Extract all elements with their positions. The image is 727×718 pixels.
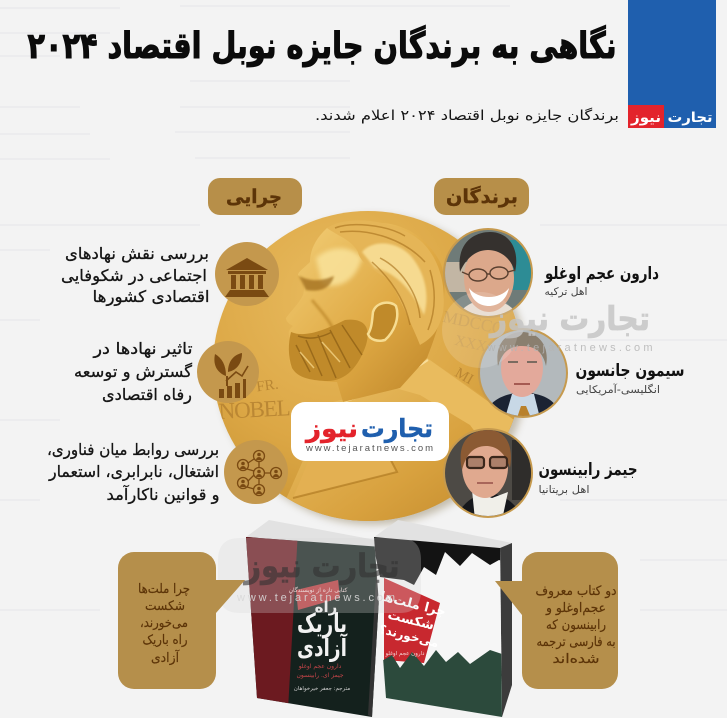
winner label: Acemoglu xyxy=(544,264,659,298)
header: blue brand block xyxy=(628,0,716,128)
center logo xyxy=(291,402,449,461)
center logo: www.tejaratnews.com xyxy=(305,443,434,454)
book: Why Nations Fail xyxy=(370,520,512,718)
book: The Narrow Corridor: کتابی تازه از نویسندگان xyxy=(289,586,348,594)
medal hair xyxy=(327,220,444,345)
portrait: James Robinson xyxy=(440,428,536,520)
center logo: نیوز xyxy=(304,414,358,444)
text block: reason 2: گسترش و توسعه xyxy=(74,362,192,382)
heading pill: why xyxy=(208,178,302,215)
winner label: Johnson xyxy=(576,361,684,396)
portrait: Simon Johnson xyxy=(478,328,570,420)
subtitle: برندگان جایزه نوبل اقتصاد ۲۰۲۴ اعلام شدند. xyxy=(315,107,619,124)
logo: red news tag xyxy=(628,105,664,128)
book: The Narrow Corridor: آزادی xyxy=(297,633,348,662)
medal lettering: MI xyxy=(452,365,476,388)
header: blue brand block: تجارت xyxy=(668,110,712,126)
book: Why Nations Fail: دارون عجم اوغلو xyxy=(384,651,425,657)
winner label: Acemoglu: دارون عجم اوغلو xyxy=(544,264,659,284)
icon: network of people xyxy=(224,440,288,504)
callout: left book title: آزادی xyxy=(151,649,180,666)
callout: left book title: شکست xyxy=(145,599,185,614)
book: The Narrow Corridor: جیمز ای. رابینسون xyxy=(296,672,344,679)
heading pill: why: چرایی xyxy=(226,186,282,208)
text block: reason 1: اجتماعی در شکوفایی xyxy=(61,266,207,286)
book: The Narrow Corridor: دارون عجم اوغلو xyxy=(298,663,342,670)
callout: right books note: شده‌اند xyxy=(552,652,600,667)
medal beard xyxy=(289,320,368,381)
medal ear xyxy=(368,303,397,341)
winner label: Johnson: انگلیسی-آمریکایی xyxy=(576,383,660,396)
watermark: winners area: تجارت نیوز xyxy=(488,299,650,339)
watermark: winners area: www.tejaratnews.com xyxy=(486,342,652,354)
text block: reason 3 xyxy=(47,440,220,505)
text block: reason 3: و قوانین ناکارآمد xyxy=(106,485,220,505)
icon: growth plant and bars xyxy=(197,341,259,403)
winner label: Johnson: سیمون جانسون xyxy=(576,361,684,381)
book: Why Nations Fail: شکست xyxy=(386,608,436,634)
text block: reason 3: بررسی روابط میان فناوری، xyxy=(47,440,219,460)
callout: left book title: چرا ملت‌ها xyxy=(138,582,190,597)
center logo: تجارت xyxy=(361,414,433,443)
callout: right books note: به فارسی ترجمه xyxy=(536,635,616,650)
heading pill: winners xyxy=(434,178,529,215)
winner label: Robinson: اهل بریتانیا xyxy=(538,484,590,496)
book: Why Nations Fail: چرا ملت‌ها xyxy=(378,589,447,620)
watermark: books area: تجارت نیوز xyxy=(243,547,400,585)
callout: right books note: رابینسون که xyxy=(546,618,606,633)
book: The Narrow Corridor: راه xyxy=(315,598,337,616)
medal lettering xyxy=(218,307,505,424)
callout: right books note xyxy=(495,552,618,689)
medal lettering: FR. xyxy=(255,377,280,395)
book: The Narrow Corridor xyxy=(240,520,386,717)
medal lettering: XXX xyxy=(453,333,489,355)
text block: reason 3: اشتغال، نابرابری، استعمار xyxy=(48,462,219,482)
text block: reason 2: تاثیر نهادها در xyxy=(92,339,192,359)
text block: reason 2 xyxy=(74,339,192,405)
nobel medal xyxy=(213,211,528,530)
text block: reason 2: رفاه اقتصادی xyxy=(102,385,192,405)
winner label: Robinson xyxy=(538,460,638,496)
portrait: Daron Acemoglu xyxy=(440,228,536,320)
icon: institution building xyxy=(215,242,279,306)
callout: right books note: دو کتاب معروف xyxy=(536,584,617,599)
callout: left book title: راه باریک xyxy=(142,633,188,648)
medal brow and eye xyxy=(299,276,334,291)
text block: reason 1 xyxy=(61,244,210,307)
watermark: winners area xyxy=(442,292,652,368)
medal head xyxy=(286,223,444,402)
header: blue brand block: نیوز xyxy=(630,110,661,126)
medal face highlight xyxy=(316,248,362,286)
winner label: Acemoglu: اهل ترکیه xyxy=(544,286,588,298)
watermark: books area: www.tejaratnews.com xyxy=(236,592,395,604)
text block: reason 1: بررسی نقش نهادهای xyxy=(65,244,209,264)
book: Why Nations Fail: می‌خورند؟ xyxy=(377,622,440,651)
heading pill: winners: برندگان xyxy=(446,185,518,208)
book: The Narrow Corridor: باریک xyxy=(297,609,347,639)
watermark: books area xyxy=(218,538,421,613)
medal lettering: NOBEL xyxy=(218,395,291,424)
medal bust coat xyxy=(286,392,514,521)
callout: right books note: عجم‌اوغلو و xyxy=(545,601,606,616)
text block: reason 1: اقتصادی کشورها xyxy=(92,287,210,307)
callout: left book title xyxy=(118,552,245,689)
book: The Narrow Corridor: مترجم: جعفر خیرخواهان xyxy=(294,686,350,692)
medal lettering: MDCCC xyxy=(441,307,505,338)
callout: left book title: می‌خورند، xyxy=(140,616,188,631)
winner label: Robinson: جیمز رابینسون xyxy=(538,460,638,480)
